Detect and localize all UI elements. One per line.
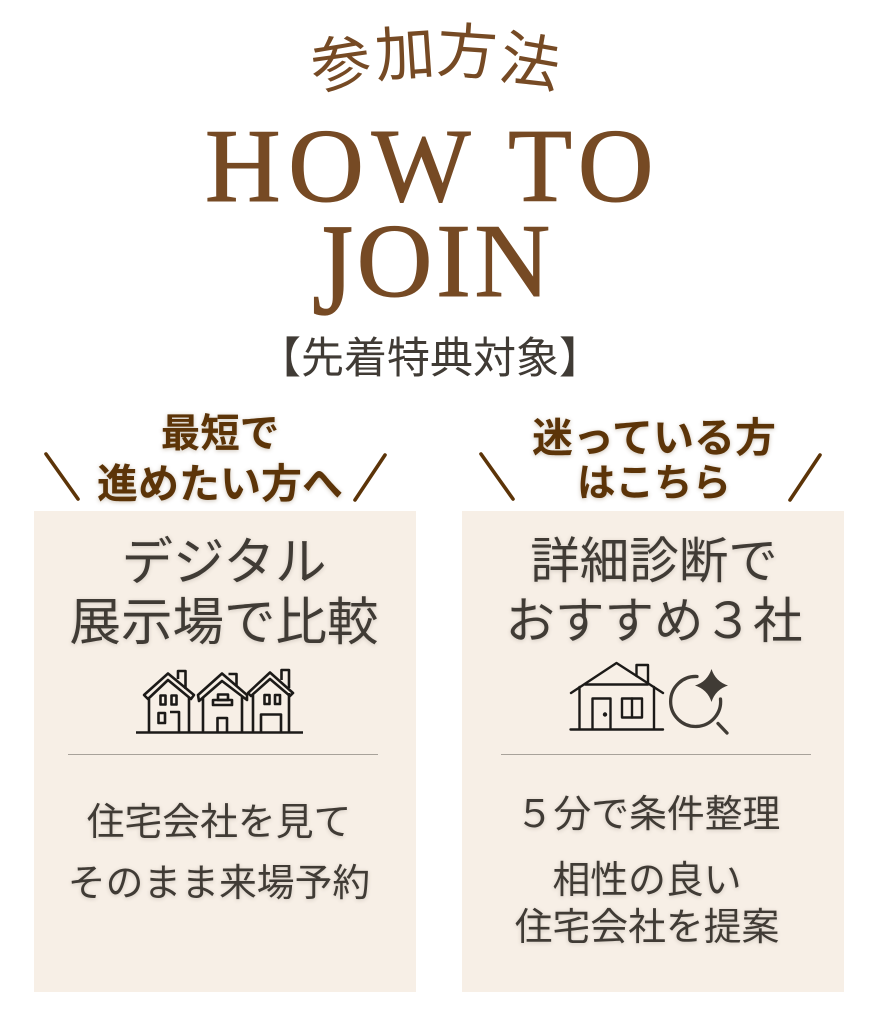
heading: Japanese title on an arc (307, 17, 565, 102)
divider: left (68, 754, 378, 755)
text: right lines 2 and 3: 相性の良い (552, 860, 742, 902)
callout: right (532, 415, 776, 505)
callout: left: 最短で (161, 412, 279, 456)
callout: right: はこちら (577, 462, 731, 505)
panel heading: detailed diagnosis: おすすめ３社 (506, 594, 802, 649)
subtitle: early bird bonus: 【先着特典対象】 (258, 335, 602, 383)
heading: HOW TO JOIN: J (312, 196, 357, 342)
text: left line 1: 住宅会社を見て (87, 802, 351, 844)
panel heading: detailed diagnosis (506, 534, 802, 649)
text: right line 1: ５分で条件整理 (516, 794, 780, 836)
panel heading: digital showroom (69, 533, 378, 651)
heading: Japanese title on an arc: 方 (435, 17, 499, 88)
callout: right: 迷っている方 (532, 415, 776, 461)
heading: Japanese title on an arc: 参 (307, 27, 375, 102)
heading: HOW TO JOIN: OIN (357, 202, 554, 319)
icon: three houses (136, 668, 303, 734)
panel heading: digital showroom: デジタル (122, 533, 326, 591)
callout: left (96, 412, 343, 507)
callout: left: 進めたい方へ (97, 461, 343, 507)
panel heading: detailed diagnosis: 詳細診断で (530, 534, 778, 589)
heading: HOW TO JOIN (205, 107, 661, 342)
heading: Japanese title on an arc: 法 (495, 24, 565, 101)
icon: house and sparkle magnifier (569, 662, 729, 735)
heading: Japanese title on an arc: 加 (373, 19, 437, 90)
panel heading: digital showroom: 展示場で比較 (69, 593, 378, 651)
divider: right (501, 754, 811, 755)
text: right lines 2 and 3: 住宅会社を提案 (515, 907, 779, 949)
text: left line 2: そのまま来場予約 (68, 863, 370, 905)
panel: digital showroom (34, 511, 416, 992)
panel: detailed diagnosis (462, 511, 844, 992)
text: right lines 2 and 3 (515, 860, 779, 949)
heading: HOW TO JOIN: HOW TO (205, 107, 661, 224)
